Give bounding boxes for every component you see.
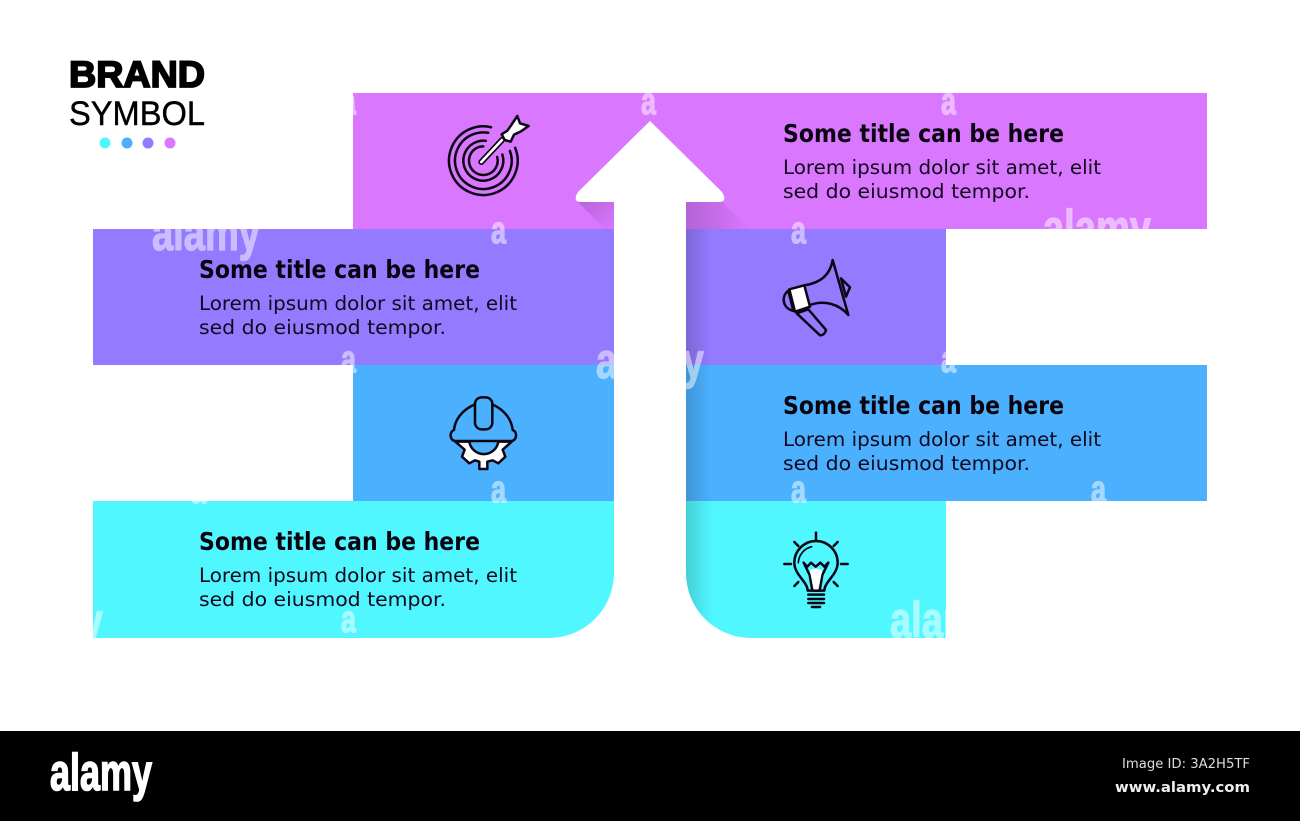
watermark overlay: a [341,81,357,123]
watermark overlay: a [191,470,207,512]
watermark overlay: alamy [596,333,704,389]
arrow shaft shadow [686,229,706,620]
icon: target with dart [439,116,529,205]
panel: blue band: sed do eiusmod tempor. [783,452,1030,475]
panel: violet band: sed do eiusmod tempor. [199,316,446,339]
watermark overlay: alamy [1043,200,1151,256]
footer bar: alamy [50,744,152,802]
panel: cyan band: Lorem ipsum dolor sit amet, elit [199,564,517,587]
icon: light bulb [784,533,848,607]
panel: purple band: sed do eiusmod tempor. [783,180,1030,203]
logo: brand symbol: SYMBOL [69,95,205,133]
icon: megaphone [784,260,850,335]
watermark overlay: a [941,81,957,123]
panel: cyan band [93,501,946,638]
watermark overlay: alamy [890,592,998,648]
panel: cyan band: Some title can be here [199,527,480,556]
panel: purple band: Some title can be here [783,119,1064,148]
arrow [576,121,724,640]
watermark overlay [0,81,1151,649]
footer bar [0,731,1300,821]
watermark overlay: a [941,339,957,381]
watermark overlay: a [1091,469,1107,511]
watermark overlay: a [341,599,357,641]
panel: cyan band: sed do eiusmod tempor. [199,588,446,611]
watermark overlay: a [791,469,807,511]
panel: blue band [353,365,1207,501]
panel: blue band: Lorem ipsum dolor sit amet, elit [783,428,1101,451]
watermark overlay: a [491,469,507,511]
footer bar: www.alamy.com [1115,780,1250,796]
icon: helmet with gear [451,397,516,469]
panel: violet band: Lorem ipsum dolor sit amet, elit [199,292,517,315]
watermark overlay: a [641,81,657,123]
panel: violet band: Some title can be here [199,255,480,284]
logo: brand symbol: BRAND [69,54,205,95]
watermark overlay: a [341,339,357,381]
watermark overlay: a [491,210,507,252]
watermark overlay: a [791,210,807,252]
watermark overlay: alamy [152,205,260,261]
panel: purple band: Lorem ipsum dolor sit amet, elit [783,156,1101,179]
footer bar: Image ID: 3A2H5TF [1122,757,1250,772]
panel: violet band [93,229,946,365]
panel: blue band: Some title can be here [783,391,1064,420]
panel: purple band [353,93,1207,229]
logo: brand symbol [69,54,205,148]
